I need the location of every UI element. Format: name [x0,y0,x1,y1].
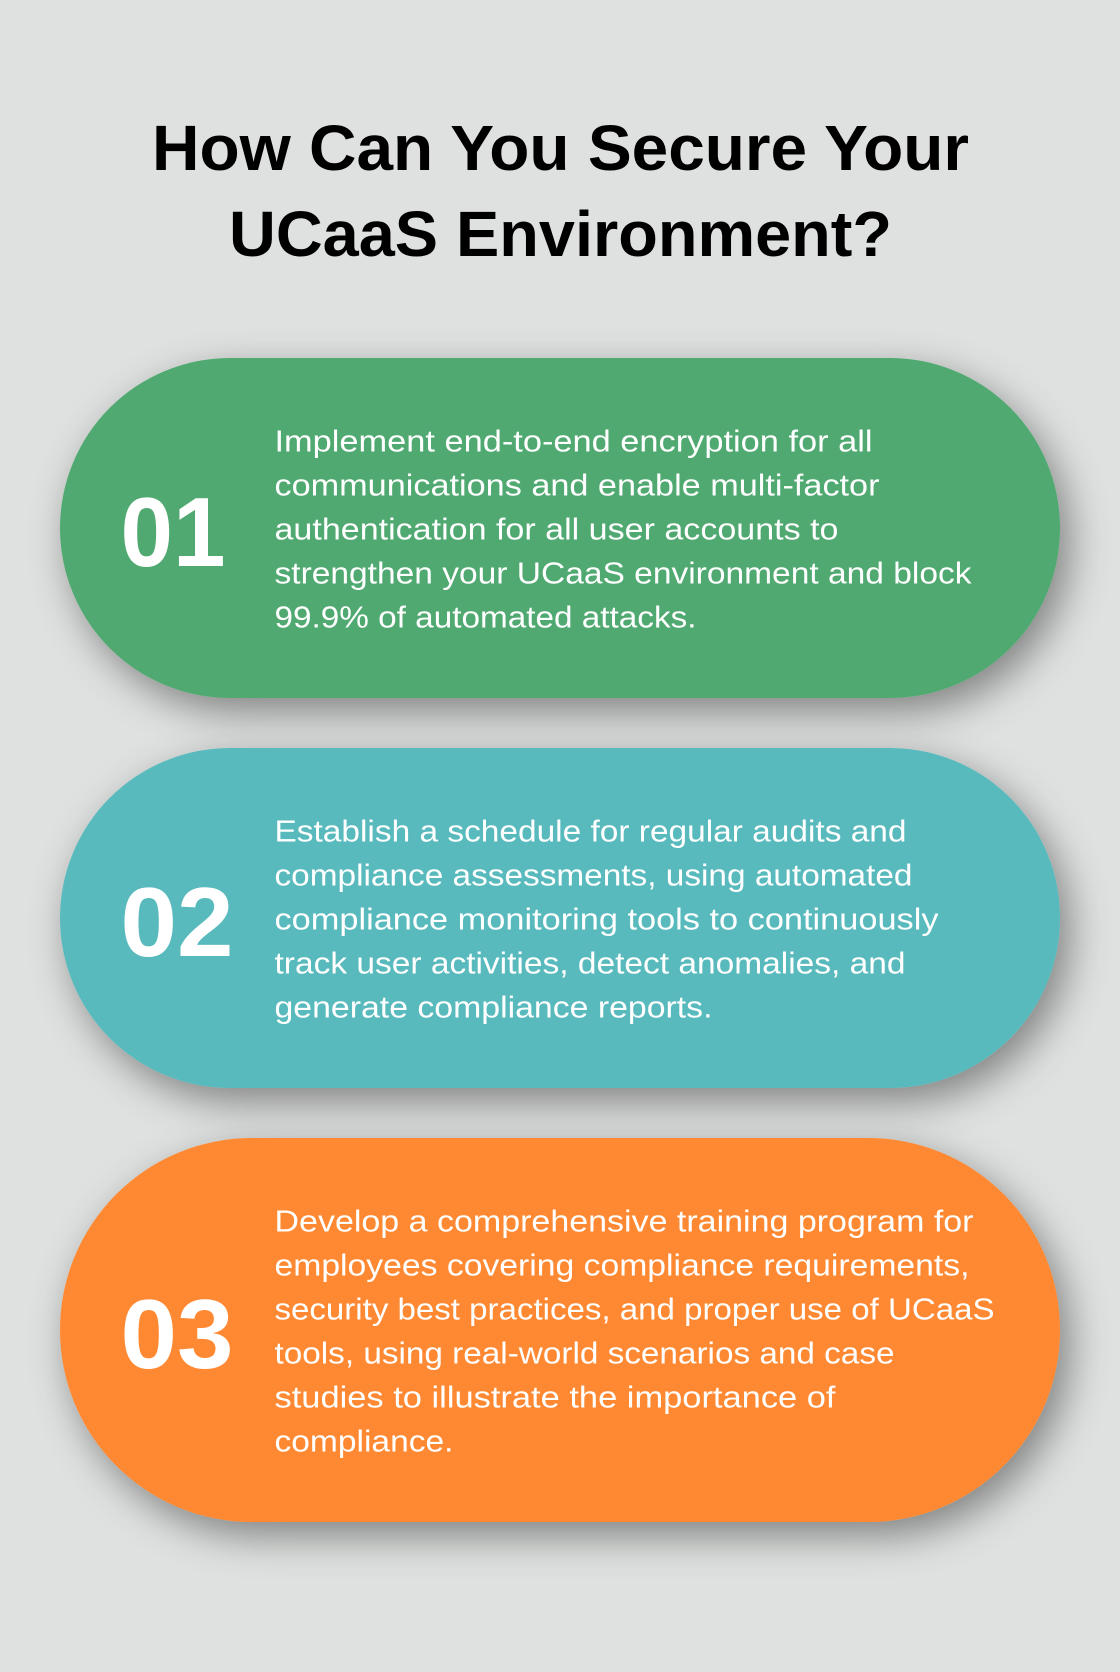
green pill background [60,358,1060,698]
step number 02: 02 [120,867,234,977]
step 03 description: security best practices, and proper use of UCaaS [274,1292,994,1326]
title: UCaaS Environment? [229,198,892,270]
step 02 description [274,814,939,1024]
step 01 description: strengthen your UCaaS environment and block [274,556,972,590]
step 01 description: 99.9% of automated attacks. [274,600,696,634]
step 02 description: compliance monitoring tools to continuously [274,902,939,936]
step 03 description: employees covering compliance requirements, [274,1248,970,1282]
step 02 description: track user activities, detect anomalies, and [274,946,906,980]
step 01 description: communications and enable multi-factor [274,468,880,502]
teal pill background [60,748,1060,1088]
step number 01: 01 [120,477,226,587]
title [152,112,969,270]
step 03 description: Develop a comprehensive training program for [274,1204,974,1238]
step 02 description: generate compliance reports. [274,990,712,1024]
panel: step 01 encryption and MFA [60,358,1060,698]
step 03 description: studies to illustrate the importance of [274,1380,836,1414]
panel: step 03 employee training [60,1138,1060,1522]
step 01 description [274,424,972,634]
step 01 description: Implement end-to-end encryption for all [274,424,872,458]
panel: step 02 audits and compliance monitoring [60,748,1060,1088]
step 02 description: compliance assessments, using automated [274,858,912,892]
step 02 description: Establish a schedule for regular audits and [274,814,906,848]
step 03 description: tools, using real-world scenarios and case [274,1336,894,1370]
step number 03: 03 [120,1279,234,1389]
step 01 description: authentication for all user accounts to [274,512,838,546]
orange pill background [60,1138,1060,1522]
title: How Can You Secure Your [152,112,969,184]
step 03 description: compliance. [274,1424,454,1458]
step 03 description [274,1204,994,1458]
